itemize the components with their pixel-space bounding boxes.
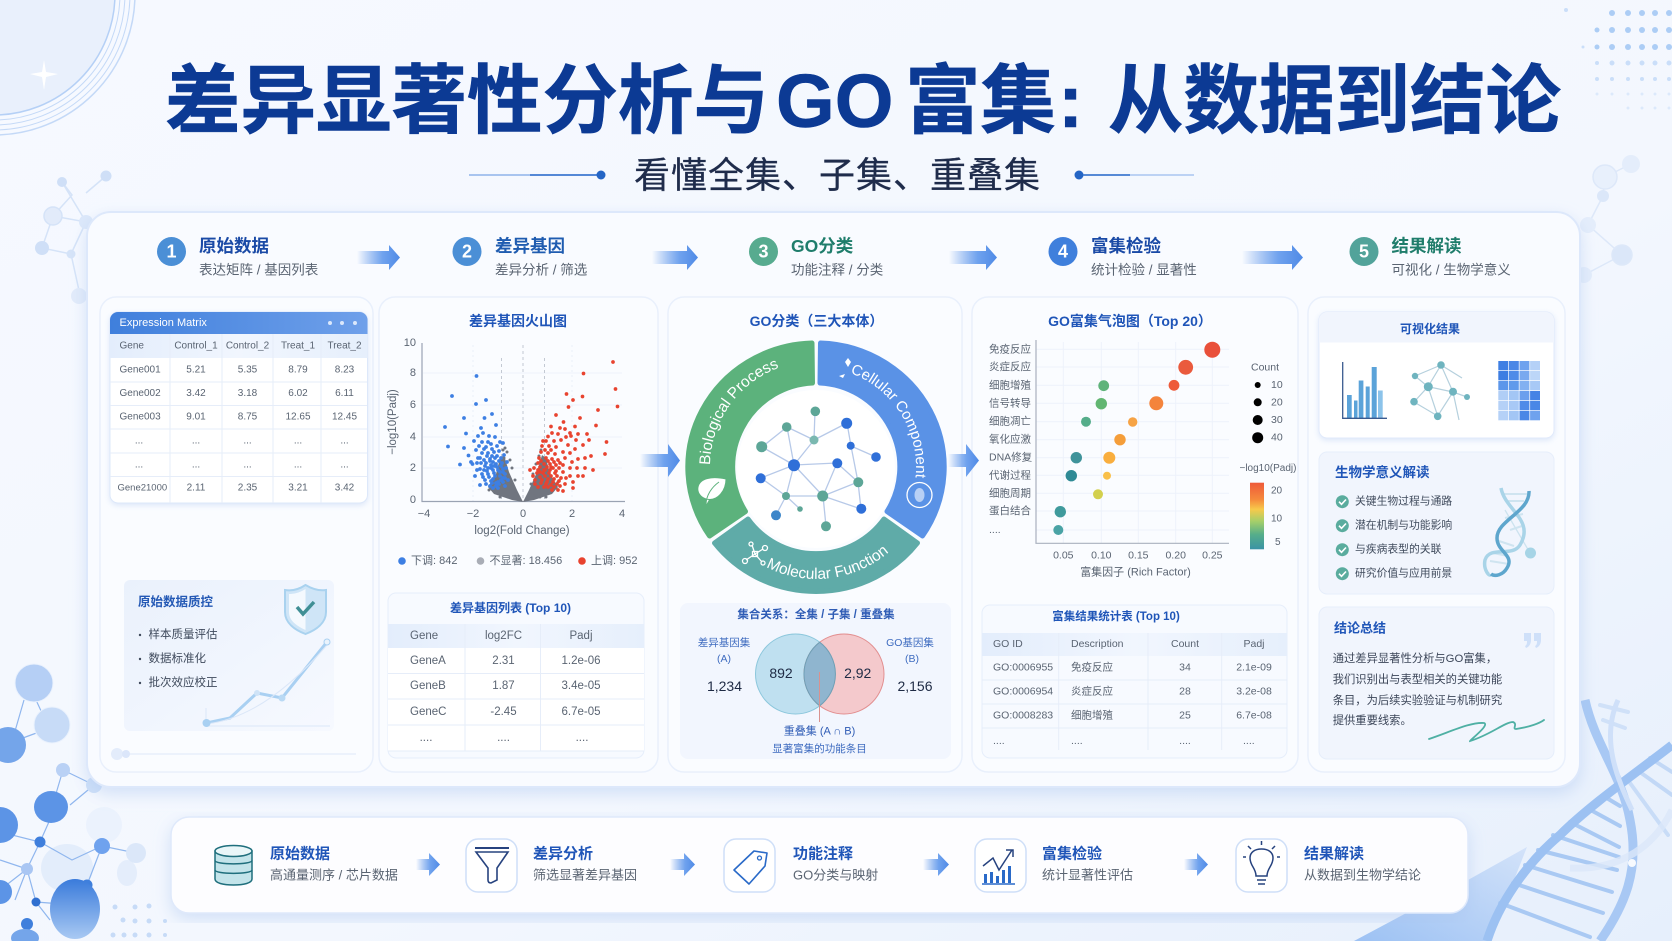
table: enrichment statistics: 6.7e-08: [1236, 710, 1272, 722]
table: enrichment statistics: 25: [1179, 710, 1191, 722]
table: enrichment statistics: 富集结果统计表 (Top 10): [1052, 609, 1180, 623]
card: set relations venn: 1,234: [707, 678, 742, 694]
legend: volcano: 不显著: 18.456: [490, 553, 562, 567]
table: expression matrix: 3.42: [335, 482, 355, 494]
table: top differential genes: Gene: [410, 630, 438, 642]
decoration: top-right dot grid: [1564, 8, 1672, 110]
card: conclusion: 提供重要线索。: [1333, 713, 1412, 727]
card: raw data QC: 原始数据质控: [138, 594, 214, 609]
step 3 header: 3: [758, 242, 769, 262]
table: expression matrix: ...: [243, 436, 252, 446]
workflow: functional annotation: GO分类与映射: [793, 868, 878, 882]
icon: tag: [724, 839, 775, 892]
table: top differential genes: ....: [420, 732, 432, 744]
chart: volcano plot: [387, 337, 625, 537]
arrow: volcano to GO: [640, 444, 680, 477]
table: expression matrix: Gene001: [120, 364, 161, 376]
segment: Molecular Function: Molecular Function: [767, 547, 888, 579]
chart: volcano plot: 4: [619, 508, 625, 520]
chart: volcano plot: 2: [569, 508, 575, 520]
chart: volcano plot: −4: [418, 508, 430, 520]
table: expression matrix: 9.01: [186, 412, 206, 422]
check list: 关键生物过程与通路: [1355, 494, 1452, 508]
legend: colour bar: [1240, 463, 1296, 549]
table: expression matrix: ...: [243, 460, 252, 470]
table: expression matrix: ...: [294, 436, 302, 446]
chart: bubble plot: 富集因子 (Rich Factor): [1080, 564, 1191, 578]
chart: volcano plot: 0: [410, 494, 416, 506]
chart: bubble plot: 代谢过程: [989, 468, 1031, 481]
arrow: step 2 to 3: [652, 245, 698, 270]
card: set relations venn: (A): [717, 653, 731, 665]
step 1 header: 1: [166, 242, 177, 262]
check list: [1336, 494, 1452, 580]
icon: bar chart: [1343, 362, 1387, 418]
step 3 header: 功能注释 / 分类: [791, 262, 883, 278]
decoration: right faint molecule: [1576, 155, 1640, 283]
table: enrichment statistics: 炎症反应: [1071, 685, 1113, 698]
workflow: enrichment test: 富集检验: [1042, 844, 1102, 862]
card: set relations venn: 显著富集的功能条目: [772, 742, 867, 755]
chart: bubble plot: 细胞凋亡: [989, 415, 1031, 428]
workflow: interpretation: 从数据到生物学结论: [1304, 868, 1421, 882]
chart: GO donut: [685, 340, 947, 594]
card: conclusion: 我们识别出与表型相关的关键功能: [1333, 672, 1502, 686]
chart: bubble plot: 免疫反应: [989, 342, 1031, 355]
title: GO: [776, 59, 893, 143]
legend: count: 10: [1271, 379, 1283, 391]
subtitle: [469, 154, 1194, 196]
table: enrichment statistics: Padj: [1243, 638, 1265, 650]
segment: Molecular Function: [712, 516, 920, 594]
table: expression matrix: 3.42: [186, 388, 206, 399]
table: enrichment statistics: 3.2e-08: [1236, 686, 1272, 698]
table: enrichment statistics: ....: [1071, 735, 1083, 747]
workflow: interpretation: [1236, 839, 1421, 892]
table: expression matrix: 3.18: [238, 388, 258, 399]
table: enrichment statistics: ....: [1179, 735, 1191, 747]
legend: volcano: 下调: 842: [411, 554, 457, 567]
table: top differential genes: 1.2e-06: [561, 655, 601, 667]
step 3 header: [749, 236, 883, 278]
legend: count: 40: [1271, 432, 1283, 444]
table: expression matrix: Treat_2: [327, 340, 362, 352]
icon: funnel: [466, 839, 517, 892]
table: top differential genes: Padj: [569, 630, 593, 642]
arrow: step 1 to 2: [357, 245, 400, 270]
step 1 header: [157, 236, 319, 278]
table: top differential genes: log2FC: [485, 630, 522, 642]
step 1 header: 表达矩阵 / 基因列表: [199, 262, 319, 278]
panel: differential genes: [379, 297, 658, 772]
chart: bubble plot: [989, 340, 1296, 578]
step 4 header: [1048, 236, 1197, 278]
card: set relations venn: 集合关系：全集 / 子集 / 重叠集: [737, 607, 895, 621]
step 3 header: GO分类: [791, 236, 854, 256]
workflow: differential analysis: 差异分析: [533, 844, 593, 862]
table: expression matrix: ...: [294, 460, 302, 470]
table: enrichment statistics: Count: [1171, 638, 1199, 650]
card: set relations venn: GO基因集: [886, 636, 934, 649]
heading: volcano plot: 差异基因火山图: [469, 313, 567, 329]
table: expression matrix: Control_2: [226, 340, 270, 352]
workflow: raw data: 高通量测序 / 芯片数据: [270, 868, 398, 882]
legend: volcano: [398, 553, 637, 567]
table: top differential genes: [388, 593, 644, 758]
chart: bubble plot: 0.10: [1091, 550, 1112, 562]
panel: GO classification: [668, 296, 962, 772]
step 2 header: [452, 236, 588, 278]
chart: volcano plot: 0: [520, 508, 526, 520]
workflow: functional annotation: 功能注释: [793, 844, 853, 862]
icon: database: [215, 846, 252, 885]
subtitle: 看懂全集、子集、重叠集: [634, 154, 1040, 196]
arrow: step 3 to 4: [949, 245, 997, 270]
step 4 header: 4: [1058, 242, 1068, 262]
chart: volcano plot: 6: [410, 399, 416, 411]
table: enrichment statistics: GO:0008283: [993, 710, 1053, 722]
main panel: [87, 212, 1580, 787]
arrow: step 4 to 5: [1242, 245, 1303, 270]
table: enrichment statistics: ....: [993, 735, 1005, 747]
chart: bubble plot: 细胞周期: [989, 486, 1031, 499]
table: expression matrix: 6.11: [335, 388, 354, 399]
table: expression matrix: 8.23: [335, 364, 355, 376]
legend: colour bar: 5: [1275, 537, 1281, 548]
table: expression matrix: 12.65: [285, 412, 311, 422]
card: set relations venn: (B): [905, 653, 919, 665]
table: expression matrix: ...: [135, 436, 143, 446]
panel: interpretation: [1308, 297, 1565, 772]
arrow: strip 3: [923, 853, 949, 876]
card: biological meaning: 生物学意义解读: [1335, 464, 1430, 480]
table: expression matrix: Control_1: [174, 340, 218, 352]
check list: 潜在机制与功能影响: [1355, 518, 1452, 532]
decoration: bottom-right DNA helix: [1354, 700, 1672, 941]
step 2 header: 2: [462, 242, 472, 262]
check list: 与疾病表型的关联: [1355, 542, 1442, 556]
decoration: bottom-left blue molecules: [0, 664, 167, 941]
card: set relations venn: [680, 603, 951, 759]
arrow: strip 1: [416, 853, 440, 876]
step 4 header: 统计检验 / 显著性: [1091, 262, 1197, 278]
workflow: functional annotation: [724, 839, 878, 892]
chart: bubble plot: 0.20: [1165, 550, 1186, 562]
table: expression matrix: Gene002: [120, 388, 161, 399]
table: top differential genes: GeneA: [410, 655, 446, 667]
table: top differential genes: -2.45: [490, 706, 517, 718]
legend: count: 30: [1271, 414, 1283, 426]
chart: bubble plot: 0.25: [1202, 550, 1223, 562]
icon: network: [1410, 361, 1470, 420]
icon: DNA helix: [1485, 488, 1536, 575]
step 5 header: [1350, 236, 1511, 278]
step 5 header: 结果解读: [1392, 236, 1462, 256]
table: expression matrix: 8.75: [238, 412, 258, 422]
segment: Biological Process: Biological Process: [699, 360, 778, 464]
bottom workflow strip: [171, 817, 1468, 913]
workflow: differential analysis: [466, 839, 637, 892]
step 4 header: 富集检验: [1091, 236, 1161, 256]
chart: volcano plot: −2: [467, 508, 479, 520]
icon: lightbulb: [1236, 839, 1287, 892]
card: raw data QC: 数据标准化: [148, 651, 206, 665]
card: raw data QC: 样本质量评估: [148, 627, 218, 641]
chart: volcano plot: 2: [410, 462, 416, 474]
workflow: differential analysis: 筛选显著差异基因: [533, 868, 637, 882]
chart: bubble plot: 0.05: [1053, 550, 1074, 562]
title: 差异显著性分析与: [165, 59, 769, 143]
check list: 研究价值与应用前景: [1355, 566, 1452, 580]
points: up-regulated: [530, 362, 618, 491]
table: enrichment statistics: ....: [1243, 735, 1255, 747]
heading: GO classes: GO分类（三大本体）: [750, 313, 883, 329]
legend: colour bar: −log10(Padj): [1240, 463, 1296, 474]
workflow: raw data: [215, 844, 398, 885]
decoration: top-left rings: [0, 0, 135, 135]
card: biological meaning: [1319, 452, 1554, 594]
table: expression matrix: Expression Matrix: [120, 317, 207, 329]
table: enrichment statistics: GO:0006955: [993, 662, 1053, 674]
chart: bubble plot: 0.15: [1128, 550, 1149, 562]
table: enrichment statistics: GO:0006954: [993, 686, 1053, 698]
table: expression matrix: ...: [192, 460, 200, 470]
icon: quote mark: [1524, 633, 1541, 648]
arrow: GO to enrichment: [948, 444, 979, 477]
card: conclusion: 结论总结: [1334, 620, 1386, 636]
legend: colour bar: 10: [1271, 514, 1283, 524]
table: enrichment statistics: 免疫反应: [1071, 661, 1113, 674]
table: top differential genes: GeneB: [410, 680, 446, 692]
table: enrichment statistics: [982, 605, 1287, 758]
panel: enrichment: [972, 297, 1298, 772]
table: expression matrix: 2.11: [187, 482, 206, 494]
card: conclusion: [1319, 607, 1554, 759]
card: set relations venn: 差异基因集: [698, 636, 751, 649]
venn diagram: 2,92: [844, 665, 872, 681]
card: visualisation results: 可视化结果: [1400, 321, 1460, 336]
icon: heatmap: [1498, 361, 1540, 420]
segment: Biological Process: [685, 340, 815, 538]
table: top differential genes: GeneC: [410, 706, 446, 718]
card: set relations venn: 重叠集 (A ∩ B): [784, 724, 855, 738]
table: top differential genes: ....: [497, 732, 510, 744]
table: expression matrix: ...: [192, 436, 200, 446]
chart: bubble plot: ....: [989, 524, 1001, 536]
table: enrichment statistics: 28: [1179, 686, 1191, 698]
venn diagram: 892: [769, 665, 793, 681]
points: down-regulated: [445, 376, 508, 488]
title: :: [1058, 59, 1083, 143]
title: 富集: [905, 59, 1056, 143]
step 5 header: 5: [1359, 242, 1369, 262]
step 5 header: 可视化 / 生物学意义: [1392, 262, 1511, 278]
chart: bubble plot: 蛋白结合: [989, 504, 1031, 517]
table: top differential genes: 2.31: [492, 655, 515, 667]
table: expression matrix: Gene003: [120, 412, 161, 422]
card: visualisation results: [1319, 312, 1554, 438]
legend: count: [1251, 362, 1283, 444]
arrow: strip 2: [670, 853, 695, 876]
chart: bubble plot: 炎症反应: [989, 360, 1031, 373]
table: expression matrix: 2.35: [238, 482, 258, 494]
table: top differential genes: ....: [576, 732, 588, 744]
decoration: slider: [111, 748, 356, 760]
chart: bubble plot: 氧化应激: [989, 433, 1031, 446]
table: expression matrix: 8.79: [288, 364, 308, 376]
card: raw data QC: 批次效应校正: [148, 675, 218, 689]
table: expression matrix: Treat_1: [281, 340, 315, 352]
table: enrichment statistics: Description: [1071, 638, 1124, 650]
chart: volcano plot: −log10(Padj): [387, 389, 399, 455]
table: expression matrix: [110, 312, 368, 503]
chart: bubble plot: 信号转导: [989, 396, 1031, 409]
bubbles: [1053, 342, 1220, 535]
table: expression matrix: 12.45: [332, 412, 357, 422]
table: expression matrix: 3.21: [288, 482, 308, 494]
table: top differential genes: 1.87: [492, 680, 515, 692]
line chart: QC trend: [202, 639, 330, 727]
table: expression matrix: 5.35: [238, 364, 258, 376]
workflow: interpretation: 结果解读: [1304, 844, 1364, 862]
table: enrichment statistics: GO ID: [993, 638, 1023, 650]
legend: volcano: 上调: 952: [591, 554, 637, 567]
card: set relations venn: 2,156: [897, 678, 933, 694]
card: raw data QC: [124, 580, 334, 731]
heading: bubble plot: GO富集气泡图（Top 20）: [1048, 313, 1212, 329]
title: 从数据到结论: [1108, 59, 1562, 143]
table: expression matrix: ...: [340, 460, 349, 470]
segment: Cellular Component: [818, 340, 947, 538]
table: expression matrix: 5.21: [186, 364, 206, 376]
arrow: strip 4: [1184, 853, 1208, 876]
table: expression matrix: ...: [340, 436, 349, 446]
venn diagram: [756, 634, 884, 722]
table: top differential genes: 差异基因列表 (Top 10): [450, 600, 571, 615]
chart: volcano plot: 10: [404, 337, 416, 349]
legend: count: Count: [1251, 362, 1279, 374]
chart: volcano plot: 8: [410, 367, 416, 379]
panel: raw data: [100, 297, 373, 772]
segment: Cellular Component: Cellular Component: [852, 365, 926, 478]
workflow: enrichment test: 统计显著性评估: [1042, 868, 1133, 882]
table: enrichment statistics: 2.1e-09: [1236, 662, 1272, 674]
step 1 header: 原始数据: [199, 236, 269, 256]
icon: shield check: [285, 585, 326, 634]
table: enrichment statistics: 细胞增殖: [1071, 709, 1113, 722]
card: conclusion: 条目，为后续实验验证与机制研究: [1333, 693, 1502, 707]
chart: bubble plot: DNA修复: [989, 451, 1033, 464]
table: top differential genes: 3.4e-05: [561, 680, 601, 692]
chart: volcano plot: 4: [410, 431, 416, 443]
workflow: raw data: 原始数据: [270, 844, 330, 862]
card: conclusion: 通过差异显著性分析与GO富集，: [1333, 651, 1497, 665]
workflow: enrichment test: [975, 839, 1133, 892]
chart: volcano plot: log2(Fold Change): [474, 525, 570, 537]
chart: bubble plot: 细胞增殖: [989, 378, 1031, 391]
legend: colour bar: 20: [1271, 486, 1283, 496]
network graph: [756, 406, 881, 531]
table: expression matrix: Gene: [120, 340, 144, 352]
legend: count: 20: [1271, 396, 1283, 408]
decoration: left faint molecule: [35, 170, 112, 304]
table: enrichment statistics: 34: [1179, 662, 1191, 674]
signature squiggle: [1429, 720, 1544, 741]
icon: rising chart: [975, 839, 1026, 892]
table: expression matrix: ...: [135, 460, 143, 470]
step 2 header: 差异分析 / 筛选: [495, 262, 588, 278]
table: top differential genes: 6.7e-05: [561, 706, 601, 718]
table: expression matrix: Gene21000: [118, 482, 167, 494]
table: expression matrix: 6.02: [288, 388, 308, 399]
step 2 header: 差异基因: [495, 236, 565, 256]
